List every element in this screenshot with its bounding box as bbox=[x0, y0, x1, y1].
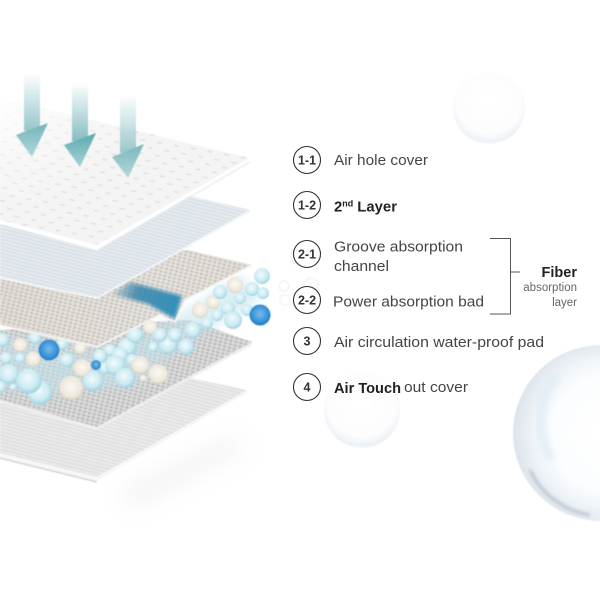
label 4: 4 bbox=[304, 380, 311, 394]
layered pad illustration bbox=[0, 90, 270, 510]
label 3: 3 bbox=[304, 334, 311, 348]
fiber absorption layer callout: Fiber bbox=[542, 265, 577, 281]
layer 1-2: second layer bbox=[0, 196, 250, 299]
label 2-1 bbox=[294, 238, 463, 275]
fiber absorption layer callout: layer bbox=[552, 297, 577, 309]
label 4: out cover bbox=[404, 379, 468, 396]
label 2-1: 2-1 bbox=[298, 248, 316, 262]
label 2-2 bbox=[294, 286, 484, 314]
layer 3: water-proof pad bbox=[0, 320, 252, 430]
label 1-2: 1-2 bbox=[298, 198, 316, 212]
label 1-2 bbox=[294, 192, 397, 218]
label 1-2: Layer bbox=[353, 198, 397, 216]
label 1-2: 2 bbox=[334, 198, 342, 216]
label 1-2: nd bbox=[342, 198, 353, 208]
water drops: faint cluster behind labels bbox=[279, 247, 318, 309]
layer 1-1: air hole cover bbox=[0, 90, 250, 252]
blue absorption channel bbox=[112, 282, 182, 319]
water drop: lower middle bbox=[324, 372, 400, 448]
layer 4: air touch out cover bbox=[0, 378, 247, 483]
label 2-2: 2-2 bbox=[298, 294, 316, 308]
arrow: right bbox=[112, 95, 144, 178]
label 3 bbox=[294, 328, 544, 354]
label 4 bbox=[294, 374, 468, 400]
label 3: Air circulation water-proof pad bbox=[334, 334, 544, 351]
label 2-2: Power absorption bad bbox=[333, 294, 484, 310]
label 2-1: Groove absorption bbox=[334, 238, 463, 256]
label 1-1: 1-1 bbox=[298, 154, 316, 168]
fiber absorption layer callout: absorption bbox=[523, 282, 577, 294]
water drop: top right bbox=[453, 72, 525, 144]
fiber absorption layer callout bbox=[523, 265, 577, 309]
water drop: large right bbox=[513, 345, 600, 521]
label 1-1: Air hole cover bbox=[334, 152, 428, 169]
absorption beads bbox=[0, 268, 270, 405]
layer shadow bbox=[120, 435, 245, 510]
layer 2-2 and 2-1: groove absorption layer bbox=[0, 250, 252, 347]
label 1-1 bbox=[294, 146, 428, 174]
label 2-1: channel bbox=[334, 258, 389, 275]
bracket bbox=[490, 238, 520, 314]
arrow: left bbox=[16, 73, 48, 157]
arrow: middle bbox=[64, 83, 96, 167]
label 4: Air Touch bbox=[334, 380, 401, 397]
